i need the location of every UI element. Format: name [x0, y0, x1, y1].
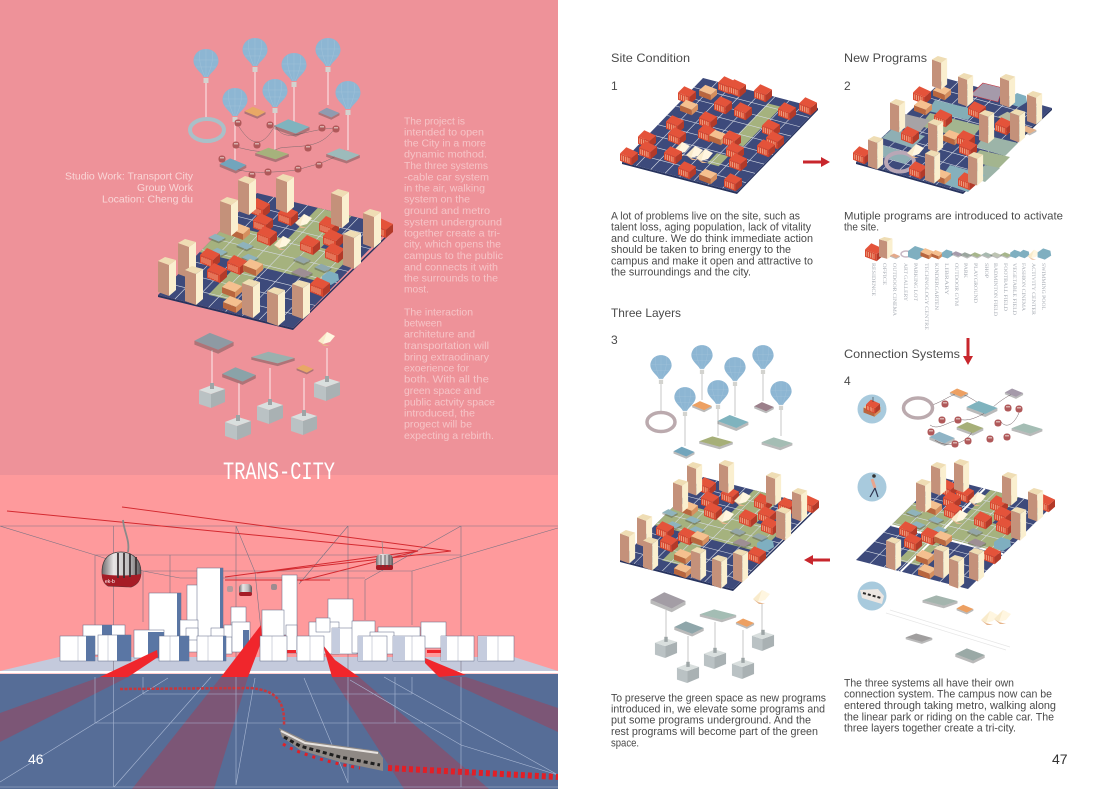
- description: campus and make it open and attractive to: [611, 256, 813, 268]
- perspective scene: city with cable cars and metro: [0, 475, 558, 789]
- text: project description: transportation will: [404, 341, 489, 352]
- legend labels: OFFICE: [881, 263, 886, 285]
- text: project description: The interaction: [404, 308, 473, 318]
- page number 46: 46: [28, 751, 44, 767]
- text: project description: progect will be: [404, 420, 472, 430]
- description: Mutiple programs are introduced to activate: [844, 210, 1063, 222]
- program legend: [865, 237, 1051, 330]
- legend labels: FASHION CINEMA: [1020, 263, 1025, 312]
- legend labels: KINDERGARTEN: [933, 263, 938, 311]
- text: project description: most.: [404, 284, 429, 296]
- legend labels: BADMINTON FIELD: [992, 263, 997, 317]
- program plate diagram: [853, 56, 1052, 194]
- scene background: [0, 475, 558, 674]
- legend labels: FOOTBALL FIELD: [1002, 263, 1007, 312]
- description: three layers together create a tri-city.: [844, 722, 1016, 734]
- description: [844, 678, 1056, 734]
- legend labels: ACTIVITY CENTER: [1030, 263, 1035, 316]
- text: project description: together create a tri-: [404, 228, 500, 240]
- translucent underground stripes: [0, 677, 558, 789]
- heading: New Programs: [844, 51, 927, 65]
- heading: Three Layers: [611, 306, 681, 320]
- text: project description: dynamic mothod.: [404, 150, 487, 160]
- description: entered through taking metro, walking along: [844, 700, 1056, 712]
- legend icons: [865, 237, 1051, 261]
- metro layer diagram: [886, 595, 1011, 664]
- text: project description: intended to open: [404, 128, 484, 138]
- red walkways: [100, 625, 466, 677]
- main site plate: [158, 174, 393, 330]
- wireframe above ground: [0, 526, 558, 672]
- icon: metro: [858, 582, 886, 610]
- page number 47: 47: [1052, 751, 1068, 767]
- description: The three systems all have their own: [844, 678, 1014, 690]
- description: should be taken to bring energy to the: [611, 244, 791, 256]
- page: right: [558, 0, 1116, 789]
- legend labels: ART GALLERY: [902, 263, 907, 302]
- text: studio credits: Location: Cheng du: [102, 194, 193, 206]
- large cable car: [102, 520, 141, 587]
- background: upper pink panel: [0, 0, 558, 475]
- heading: Site Condition: [611, 51, 690, 65]
- underground layer diagram: [650, 590, 774, 683]
- description: To preserve the green space as new programs: [611, 692, 827, 704]
- legend labels: PARK: [962, 263, 967, 279]
- legend labels: [870, 263, 1045, 330]
- description: rest programs will become part of the green: [611, 726, 818, 738]
- step number: 3: [611, 333, 618, 347]
- text: project description: and connects it with: [404, 262, 498, 274]
- underground layer: [194, 332, 340, 440]
- legend labels: SWIMMING POOL: [1040, 263, 1045, 310]
- legend labels: OUTDOOR GYM: [953, 263, 958, 307]
- description: the linear park or riding on the cable car. The: [844, 712, 1054, 724]
- text: project description: the City in a more: [404, 138, 486, 150]
- mid-row small buildings: [134, 610, 420, 658]
- description: put some programs underground. And the: [611, 714, 811, 726]
- description: [844, 210, 1063, 234]
- panel: connection systems: [844, 347, 1056, 734]
- icon: cable car: [858, 394, 886, 424]
- description: [611, 210, 813, 279]
- text: project description: green space and: [404, 386, 481, 397]
- site plate diagram: [856, 459, 1055, 589]
- heading: Connection Systems: [844, 347, 960, 361]
- metro track: [120, 688, 558, 777]
- metro train: [279, 728, 383, 771]
- wireframe below ground: [0, 677, 558, 787]
- legend labels: SHOP: [983, 263, 988, 278]
- text: studio credits: Group Work: [137, 183, 194, 194]
- site plate diagram: [620, 460, 819, 591]
- text: project description: system on the: [404, 194, 470, 206]
- text: project description: in the air, walking: [404, 184, 485, 194]
- text: project description: both. With all the: [404, 374, 489, 386]
- legend labels: VEGETABLE FIELD: [1011, 263, 1016, 316]
- legend labels: RESIDENCE: [870, 263, 875, 296]
- small cable cars: [227, 541, 393, 596]
- description: and culture. We do think immediate action: [611, 233, 813, 245]
- text: project description: [404, 116, 503, 442]
- text: project description: The project is: [404, 116, 465, 128]
- panel: new programs: [844, 51, 1063, 330]
- legend labels: PARKING LOT: [912, 263, 917, 301]
- panel: three layers: [611, 306, 827, 750]
- large cable car: ek-b: [105, 579, 115, 585]
- site plate diagram: [620, 76, 818, 194]
- balloon layer diagram: [647, 345, 792, 459]
- cable car network: [904, 388, 1042, 448]
- balloons: [194, 38, 360, 122]
- text: project description: public actvity space: [404, 398, 495, 408]
- description: introduced in, we elevate some programs and: [611, 704, 825, 716]
- description: connection system. The campus now can be: [844, 688, 1052, 700]
- cable lines: [7, 507, 451, 581]
- text: project description: The three systems: [404, 161, 488, 172]
- background: white panel: [558, 0, 1116, 789]
- description: [611, 692, 827, 750]
- icon: walker: [858, 472, 886, 502]
- panel: site condition: [611, 51, 818, 279]
- text: project description: architeture and: [404, 330, 475, 340]
- legend labels: PLAYGROUND: [972, 263, 977, 304]
- text: project description: ground and metro: [404, 206, 490, 217]
- legend labels: TECHNOLOGY CENTRE: [923, 263, 928, 330]
- step number: 2: [844, 79, 851, 93]
- text: studio credits: Studio Work: Transport City: [65, 172, 194, 182]
- text: project description: bring extraodinary: [404, 352, 490, 364]
- text: project description: -cable car system: [404, 172, 489, 184]
- text: studio credits: [65, 172, 194, 206]
- text: project description: system underground: [404, 218, 502, 228]
- text: project description: the surrounds to the: [404, 274, 498, 284]
- step number: 1: [611, 79, 618, 93]
- title: TRANS-CITY: [223, 458, 335, 487]
- legend labels: OUTDOOR CINEMA: [891, 263, 896, 317]
- text: project description: exoerience for: [404, 364, 470, 374]
- description: the surroundings and the city.: [611, 267, 751, 279]
- description: space.: [611, 738, 639, 750]
- front-row buildings: [60, 635, 514, 661]
- tall background buildings: [83, 568, 446, 655]
- text: project description: expecting a rebirth.: [404, 431, 494, 442]
- description: the site.: [844, 222, 879, 234]
- page: left: [0, 0, 558, 789]
- description: A lot of problems live on the site, such as: [611, 210, 801, 222]
- text: project description: city, which opens the: [404, 240, 501, 250]
- air layer: programs and cable cars: [190, 107, 360, 178]
- text: project description: campus to the public: [404, 251, 503, 262]
- step number: 4: [844, 374, 851, 388]
- text: project description: introduced, the: [404, 408, 475, 420]
- ground plane: [0, 657, 558, 671]
- arrow: new programs to connection systems: [963, 338, 973, 365]
- balloon strings: [206, 70, 348, 160]
- description: talent loss, aging population, lack of vitality: [611, 222, 812, 234]
- illustration: exploded axonometric of the campus: [158, 38, 393, 440]
- legend labels: LIBRARY: [943, 263, 948, 296]
- text: project description: between: [404, 318, 442, 330]
- arrow: site condition to new programs: [803, 157, 830, 167]
- arrow: connection systems to three layers: [804, 555, 830, 565]
